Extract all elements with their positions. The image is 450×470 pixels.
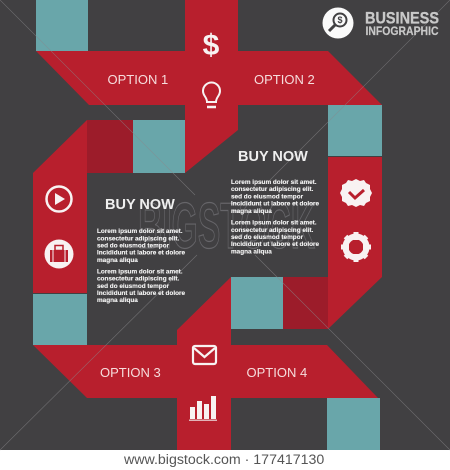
header title: BUSINESS [365,8,439,28]
ribbon: right vertical band [328,157,382,329]
teal fold: right [328,105,382,156]
text block: left: magna aliqua [97,297,138,304]
text block: right: Lorem ipsum dolor sit amet. [231,220,317,226]
text block: right: consectetur adipiscing elit. [231,186,314,193]
text block: left: consectetur adipiscing elit. [97,236,180,242]
icon: gear [341,232,371,262]
teal fold: lower centre [231,277,283,329]
option labels: OPTION 1 [108,72,168,87]
icon: envelope [193,346,216,364]
icon: dollar: $ [203,29,220,62]
footer: www.bigstock.com · 177417130 [123,452,324,468]
ribbon fold: left dark [87,120,133,173]
icon: check badge [340,179,372,207]
header title: INFOGRAPHIC [366,26,438,38]
text block: right: sed do eiusmod tempor [231,234,304,241]
text block: right: Lorem ipsum dolor sit amet. [231,179,317,186]
text block: left: Incididunt ut labore et dolore [97,290,185,297]
teal fold: bottom right [327,398,380,450]
heading: buy now right: BUY NOW [238,149,308,165]
option labels: OPTION 4 [246,365,307,380]
text block: left: Lorem ipsum dolor sit amet. [97,268,183,276]
text block: left: magna aliqua [97,257,138,264]
text block: left: sed do eiusmod tempor [97,283,170,290]
ribbon: top cross with options 1 and 2 [36,0,382,173]
ribbon: bottom cross with options 3 and 4 [33,277,378,450]
option labels [100,72,315,380]
text block: right: sed do eiusmod tempor [231,194,304,200]
icon: play [46,186,72,212]
text block: right: magna aliqua [231,248,272,256]
text block: right: consectetur adipiscing elit. [231,227,314,234]
option labels: OPTION 2 [254,72,315,87]
text block: left: consectetur adipiscing elit. [97,276,180,282]
header icon: magnifier with dollar [322,8,354,38]
teal fold: left [33,294,87,345]
text block: left: sed do eiusmod tempor [97,242,170,250]
text block: left [97,228,185,304]
text block: left: Lorem ipsum dolor sit amet. [97,228,183,235]
icon: bar chart [189,396,217,421]
text block: right: Incididunt ut labore et dolore [231,241,319,248]
option labels: OPTION 3 [100,365,161,380]
ribbon: left vertical band [33,120,87,293]
text block: right: Incididunt ut labore et dolore [231,200,319,208]
icon: light bulb [203,82,220,107]
heading: buy now left: BUY NOW [105,197,175,213]
icon: briefcase [44,240,74,268]
ribbon fold: right dark [283,277,328,329]
header title [365,8,439,38]
teal fold: upper centre [133,120,185,173]
text block: right: magna aliqua [231,208,272,215]
text block: left: Incididunt ut labore et dolore [97,250,185,256]
header icon: magnifier with dollar: $ [337,15,343,25]
teal fold: top left [36,0,88,51]
text block: right [231,179,319,256]
